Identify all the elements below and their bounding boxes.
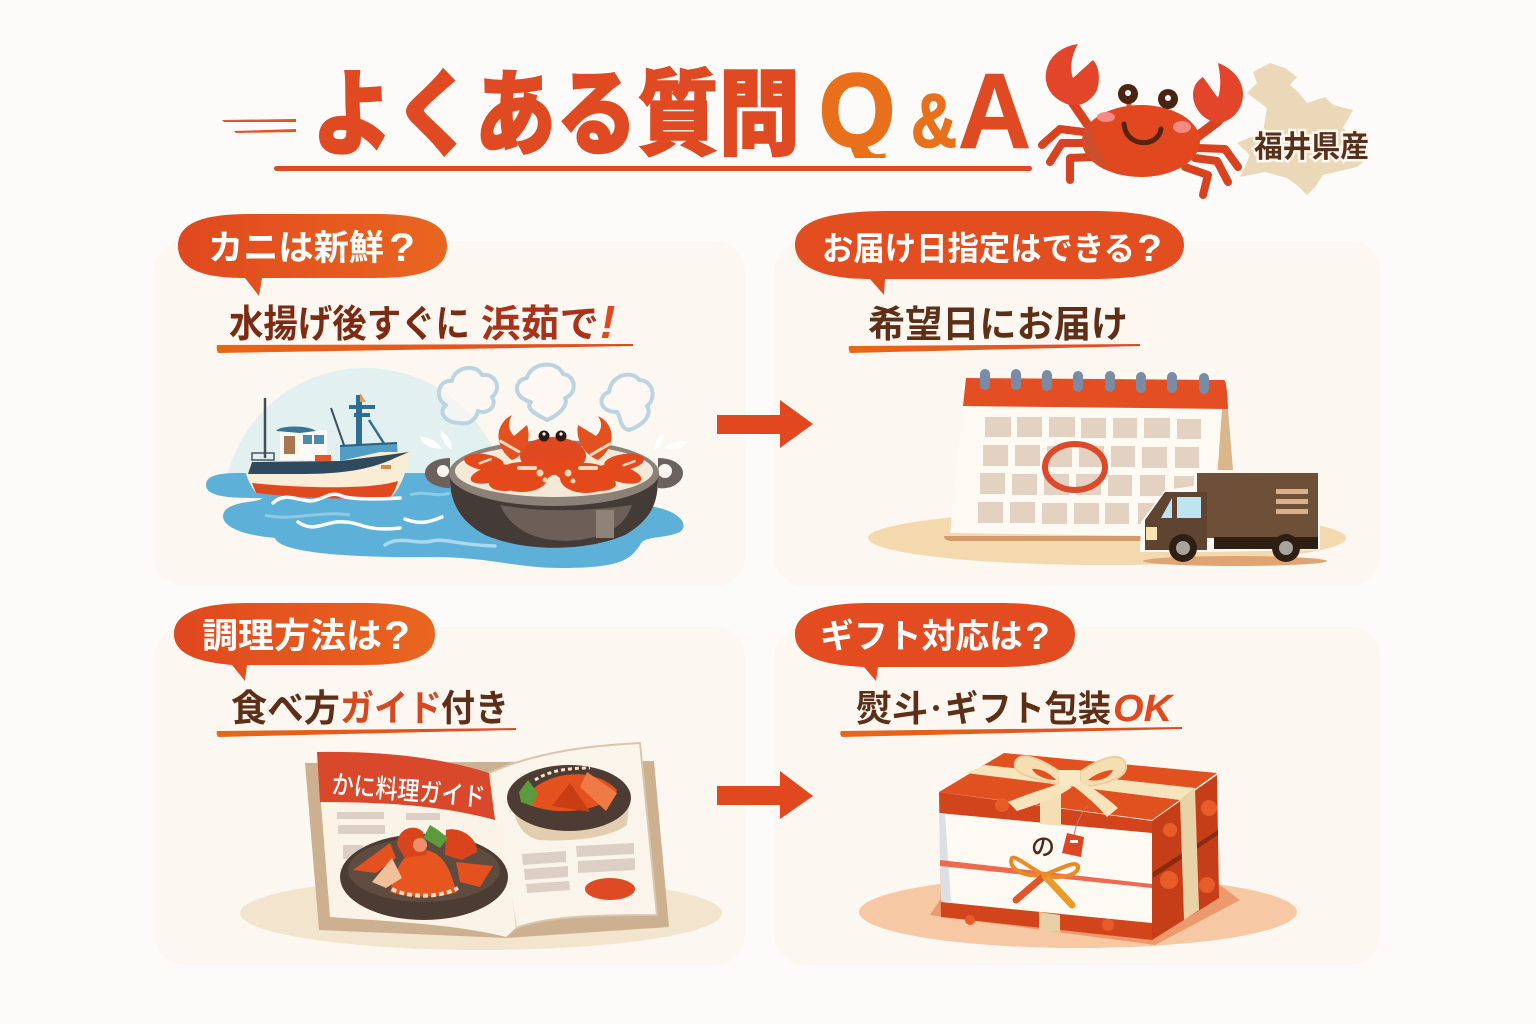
illustration: gift box [859, 753, 1297, 948]
tag [1062, 805, 1088, 857]
cabin [280, 430, 327, 460]
banner text: かに料理ガイド [330, 769, 487, 812]
title: A [958, 51, 1031, 171]
answer 3: 食べ方 [231, 688, 340, 729]
arrow: panel 3 to 4 [717, 771, 813, 819]
panel: cooking [154, 627, 745, 965]
answer 4: 熨斗 [856, 688, 928, 729]
answer 1: 水揚げ後すぐに [229, 304, 470, 346]
question bubble 1 [178, 214, 447, 296]
answer 4: ギフト包装 [945, 688, 1111, 729]
ribbons [966, 765, 1195, 800]
illustration: delivery truck [1140, 471, 1327, 566]
answer 2: 希望日にお届け [868, 304, 1128, 345]
box top [939, 753, 1217, 820]
answer 1: 浜茹で [481, 304, 599, 346]
sky circle [228, 368, 492, 474]
question bubble 2 [795, 211, 1184, 295]
question bubble 2: お届け日指定はできる [822, 230, 1135, 267]
red banner [317, 752, 495, 820]
noshi paper [939, 813, 1152, 923]
answer 3 [217, 688, 516, 737]
panel: delivery date [774, 241, 1380, 586]
question bubble 4 [795, 603, 1075, 681]
question bubble 4: ギフト対応は [820, 618, 1023, 656]
icon: crab mascot [1042, 44, 1243, 195]
page text lines [337, 812, 635, 893]
answer 1 [217, 296, 633, 353]
illustration: calendar [868, 369, 1346, 565]
illustration: fishing boat at sea [206, 368, 684, 568]
answer 4 [840, 688, 1182, 737]
illustration: crab pot [425, 415, 683, 548]
arrow: panel 1 to 2 [717, 400, 813, 448]
box side [1152, 775, 1219, 940]
red cord [940, 860, 1152, 888]
map label: 福井県産 [1254, 131, 1369, 164]
answer 4: OK [1113, 688, 1175, 730]
question bubble 1: ? [389, 226, 415, 270]
splash marks [420, 431, 687, 450]
title underline [274, 166, 1032, 171]
question bubble 3: ? [384, 614, 410, 658]
bow [1008, 756, 1126, 817]
crab in pot [463, 415, 645, 493]
hull [246, 452, 409, 499]
panel: freshness [154, 241, 745, 586]
title: Q [819, 53, 895, 169]
title: よくある質問 [312, 62, 800, 167]
masts [264, 398, 266, 458]
title speed lines [222, 119, 296, 133]
title: & [911, 79, 957, 164]
plate dish [340, 825, 508, 920]
bowl dish [507, 765, 631, 840]
answer 3: ガイド [340, 688, 442, 729]
question bubble 3 [174, 603, 435, 681]
sea [206, 473, 684, 568]
panel: gift [774, 627, 1380, 965]
question bubble 4: ? [1025, 616, 1050, 658]
illustration: recipe guide book [240, 743, 722, 950]
box front [939, 792, 1152, 940]
small bow [1011, 858, 1078, 905]
answer 1: ! [600, 296, 615, 348]
illustration: steam [439, 365, 653, 430]
question bubble 2: ? [1137, 228, 1162, 270]
noshi mark: の [1031, 834, 1055, 861]
icon: Fukui prefecture map [1237, 63, 1369, 195]
answer 3: 付き [441, 688, 509, 729]
question bubble 3: 調理方法は [202, 617, 382, 656]
question bubble 1: カニは新鮮 [208, 229, 384, 268]
